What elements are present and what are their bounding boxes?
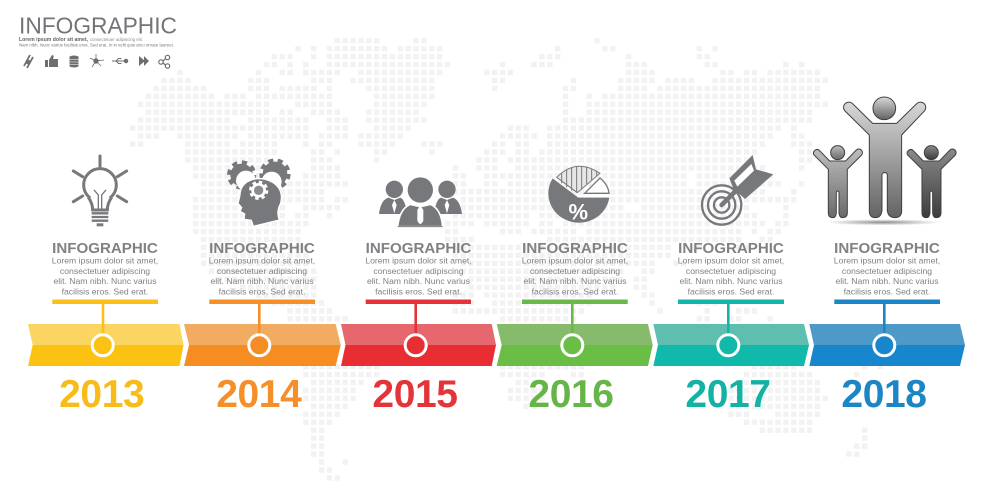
connector (834, 300, 940, 335)
connector (678, 300, 784, 335)
icon: usb (112, 58, 128, 64)
node (718, 335, 739, 356)
header description: Lorem ipsum dolor sit amet, (19, 37, 89, 43)
column: 2014 (184, 240, 341, 416)
inner gear (251, 182, 267, 198)
target rings (702, 185, 741, 225)
icon: head with gears (229, 161, 288, 226)
dotted world map background (130, 41, 886, 478)
chevron segment (653, 324, 809, 366)
text block: Lorem ipsum dolor sit amet, (522, 256, 628, 266)
text block: Lorem ipsum dolor sit amet, (365, 256, 472, 266)
header title: INFOGRAPHIC (19, 12, 177, 38)
text block: elit. Nam nibh. Nunc varius (835, 276, 939, 286)
text block: Lorem ipsum dolor sit amet, (678, 256, 784, 266)
column: 2013 (28, 240, 184, 416)
text block: facilisis eros. Sed erat. (688, 286, 774, 296)
text block: consectetuer adipiscing (686, 266, 776, 276)
node (92, 335, 113, 356)
heading: INFOGRAPHIC (834, 240, 940, 257)
icon: pie chart with percent (548, 166, 609, 224)
text block: elit. Nam nibh. Nunc varius (210, 276, 314, 286)
connector (209, 300, 315, 335)
chevron segment (28, 324, 184, 366)
text block: elit. Nam nibh. Nunc varius (367, 276, 470, 286)
icon: family with raised arms (814, 97, 956, 225)
text block: facilisis eros. Sed erat. (375, 286, 462, 296)
left child (814, 146, 862, 218)
connector (52, 300, 158, 335)
icon: fast forward (139, 56, 149, 66)
heading: INFOGRAPHIC (522, 240, 628, 257)
year: 2014 (216, 373, 302, 416)
right gear (262, 161, 288, 192)
year: 2018 (841, 373, 927, 416)
node (562, 335, 583, 356)
ground shadow (826, 219, 941, 225)
connector (366, 300, 471, 335)
icon: database (70, 56, 78, 68)
text block: elit. Nam nibh. Nunc varius (679, 276, 783, 286)
chevron segment (809, 324, 965, 366)
text block: facilisis eros. Sed erat. (532, 286, 618, 296)
column: 2016 (497, 240, 653, 416)
heading: INFOGRAPHIC (52, 240, 158, 257)
text block: Lorem ipsum dolor sit amet, (52, 256, 158, 266)
left person (379, 181, 407, 214)
column: 2015 (341, 240, 496, 416)
heading: INFOGRAPHIC (366, 240, 471, 257)
arrow (722, 155, 773, 205)
percent sign: % (569, 199, 588, 224)
node (249, 335, 270, 356)
adult figure (844, 97, 926, 218)
icon: target with arrow (702, 155, 773, 225)
node (405, 335, 426, 356)
connector (522, 300, 628, 335)
head silhouette (238, 179, 281, 226)
left gear (229, 163, 256, 191)
text block: facilisis eros. Sed erat. (219, 286, 305, 296)
center person (398, 177, 443, 227)
header description: Nam nibh. Nunc varius facilisis eros. Sed erat. In in velit quis arcu ornare laoreet. (19, 42, 174, 48)
text block: consectetuer adipiscing (842, 266, 932, 276)
right child (907, 146, 956, 218)
year: 2015 (372, 373, 458, 416)
node (874, 335, 895, 356)
header description: consectetuer adipiscing elit. (90, 37, 143, 42)
text block: consectetuer adipiscing (217, 266, 307, 276)
icon: tools (24, 55, 33, 68)
heading: INFOGRAPHIC (678, 240, 784, 257)
chevron segment (184, 324, 341, 366)
icon: light bulb (73, 156, 127, 226)
chevron segment (497, 324, 653, 366)
text block: Lorem ipsum dolor sit amet, (834, 256, 940, 266)
text block: facilisis eros. Sed erat. (844, 286, 930, 296)
text block: consectetuer adipiscing (60, 266, 150, 276)
text block: elit. Nam nibh. Nunc varius (53, 276, 157, 286)
header description (19, 37, 174, 48)
icon: share (159, 55, 170, 68)
text block: Lorem ipsum dolor sit amet, (209, 256, 315, 266)
hatched slice (557, 166, 600, 193)
right person (434, 181, 462, 214)
chevron segment (341, 324, 496, 366)
header block (19, 12, 177, 68)
text block: elit. Nam nibh. Nunc varius (523, 276, 627, 286)
header icon row (24, 54, 170, 68)
year: 2013 (59, 373, 144, 416)
text block: facilisis eros. Sed erat. (62, 286, 148, 296)
column: 2018 (809, 240, 965, 416)
icon: network (90, 54, 104, 67)
year: 2017 (685, 373, 771, 416)
pie main slice (548, 178, 609, 223)
icon: business team (379, 177, 462, 227)
text block: consectetuer adipiscing (530, 266, 620, 276)
icon: thumbs up (45, 55, 58, 67)
heading: INFOGRAPHIC (209, 240, 315, 257)
text block: consectetuer adipiscing (373, 266, 464, 276)
year: 2016 (528, 373, 614, 416)
column: 2017 (653, 240, 809, 416)
small slice (585, 178, 609, 193)
